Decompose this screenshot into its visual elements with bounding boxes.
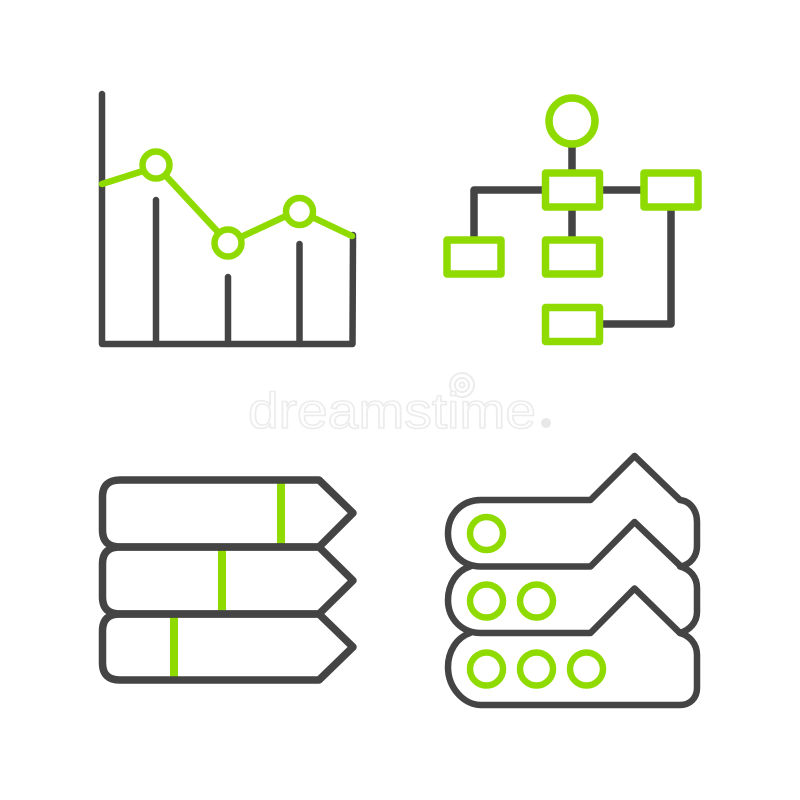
flowchart connectors	[474, 147, 671, 324]
tag outlines	[102, 480, 353, 680]
server status lights	[470, 517, 603, 686]
chart trend line	[102, 152, 352, 256]
server outlines	[448, 456, 697, 705]
flowchart nodes	[447, 98, 698, 342]
icon: line chart	[102, 94, 353, 344]
tag progress markers	[174, 480, 281, 680]
icon: server stack	[448, 456, 697, 705]
watermark spiral icon	[450, 373, 474, 397]
watermark	[248, 373, 551, 439]
chart axes and bars	[102, 94, 353, 344]
icon: flowchart	[447, 98, 698, 342]
icon: stacked arrow tags	[102, 480, 353, 680]
watermark text: dreamstime	[248, 383, 536, 439]
watermark dot	[541, 418, 551, 428]
